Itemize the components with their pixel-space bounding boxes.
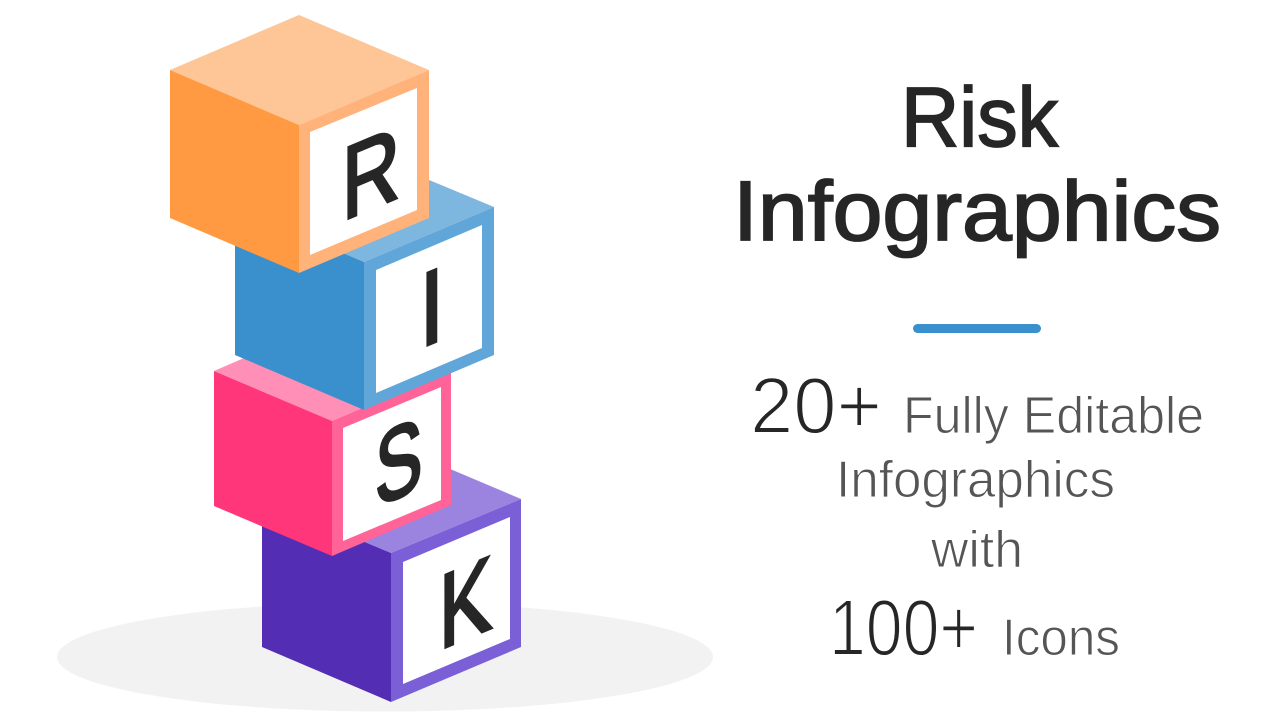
text: with: with	[930, 521, 1023, 579]
K front face	[391, 499, 521, 702]
text: Icons: Icons	[1002, 609, 1120, 667]
R side face	[170, 70, 299, 273]
S letter: S	[375, 396, 423, 530]
I front face	[364, 207, 494, 410]
I top face	[235, 153, 494, 262]
I side face	[235, 207, 364, 410]
R front face	[299, 70, 429, 273]
K letter: K	[439, 534, 492, 673]
R letter: R	[342, 105, 400, 244]
K side face	[262, 499, 391, 702]
stat: 20+: 20+	[750, 361, 882, 450]
K label panel	[403, 517, 510, 684]
S front face	[332, 370, 451, 556]
text: Infographics: Infographics	[836, 451, 1115, 509]
S label panel	[343, 387, 441, 541]
R label panel	[310, 88, 417, 255]
I label panel	[376, 225, 482, 393]
stat: 100+: 100+	[829, 583, 978, 672]
title	[733, 70, 1221, 258]
subtitle	[750, 361, 1204, 672]
ground shadow	[57, 602, 713, 712]
cube: I	[235, 153, 494, 410]
cube: R	[170, 15, 429, 273]
cube: K	[262, 444, 521, 702]
title line 1: Risk	[901, 70, 1059, 164]
K top face	[262, 444, 521, 553]
I letter: I	[420, 244, 444, 370]
R top face	[170, 15, 429, 125]
title line 2: Infographics	[733, 164, 1221, 258]
S side face	[214, 371, 332, 556]
text: Fully Editable: Fully Editable	[903, 387, 1204, 445]
cube: S	[214, 320, 451, 556]
divider	[913, 324, 1041, 333]
S top face	[214, 320, 451, 421]
